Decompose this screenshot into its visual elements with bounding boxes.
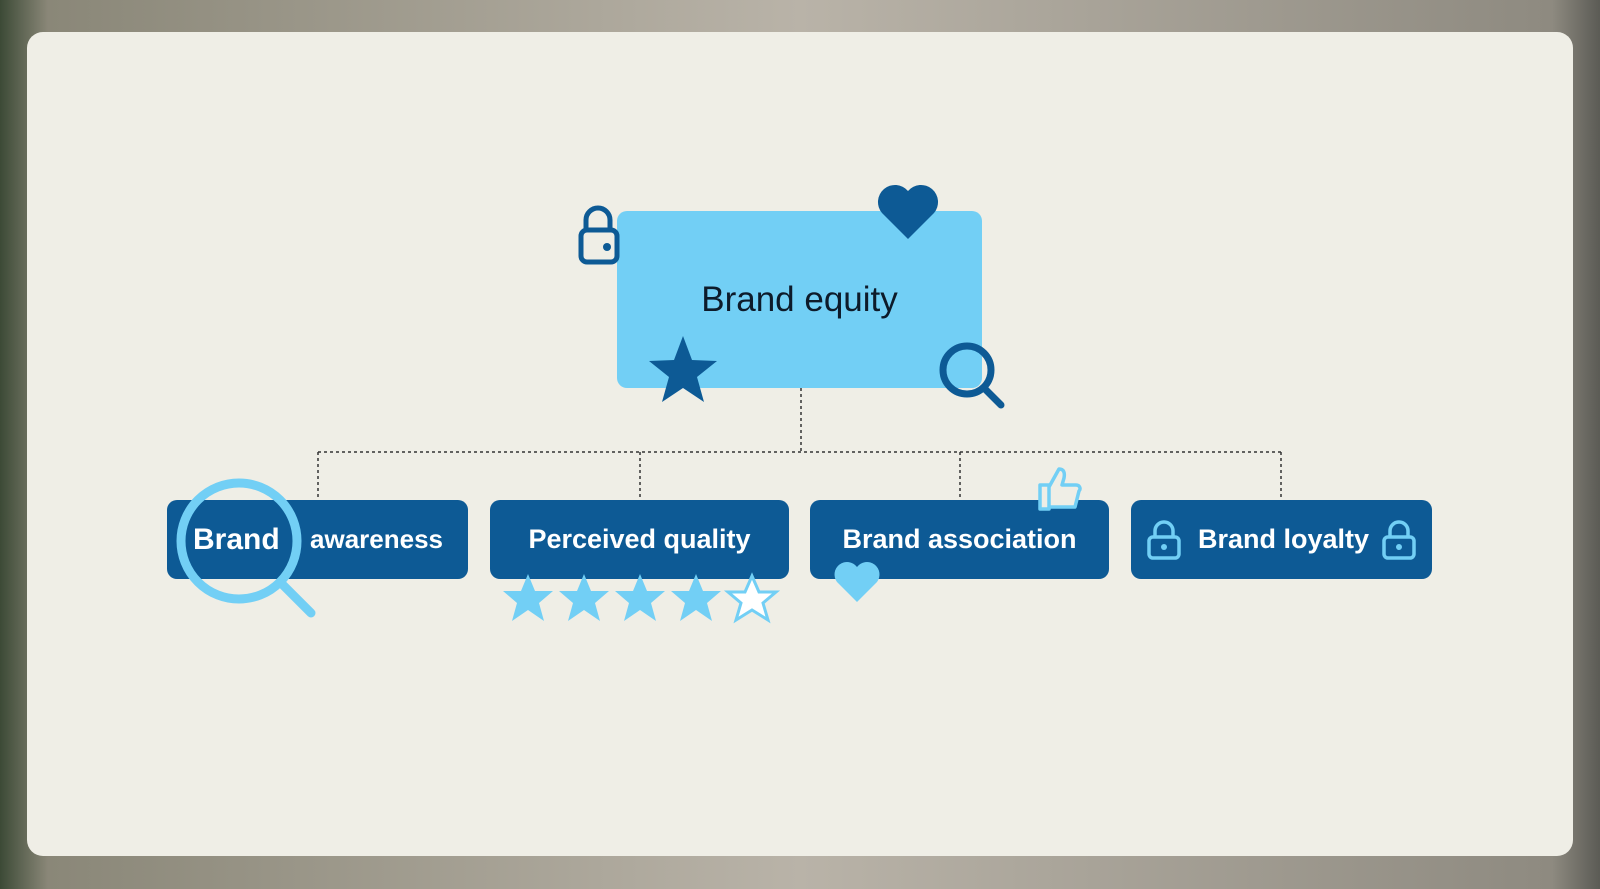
box: Perceived quality [490, 500, 789, 579]
icon: heart [878, 185, 938, 239]
heading box: Brand equity: Brand equity [701, 280, 898, 318]
box: Perceived quality: Perceived quality [528, 524, 751, 554]
box: Brand association: Brand association [842, 524, 1077, 554]
icon: heart small [834, 562, 880, 602]
box: Brand association [810, 500, 1109, 579]
box: Brand awareness: Brand [193, 522, 280, 556]
box: Brand awareness: awareness [310, 524, 443, 554]
icon: magnifier over Brand [176, 478, 316, 618]
heading box: Brand equity [617, 211, 982, 388]
icon: stars rating [503, 572, 780, 624]
icon: lock [578, 206, 620, 264]
icon: star [649, 336, 717, 402]
icon: thumbs up [1038, 467, 1082, 511]
icon: magnifier [940, 342, 1004, 408]
box: Brand loyalty [1131, 500, 1432, 579]
box: Brand awareness [167, 500, 468, 579]
box: Brand loyalty: Brand loyalty [1198, 524, 1369, 554]
